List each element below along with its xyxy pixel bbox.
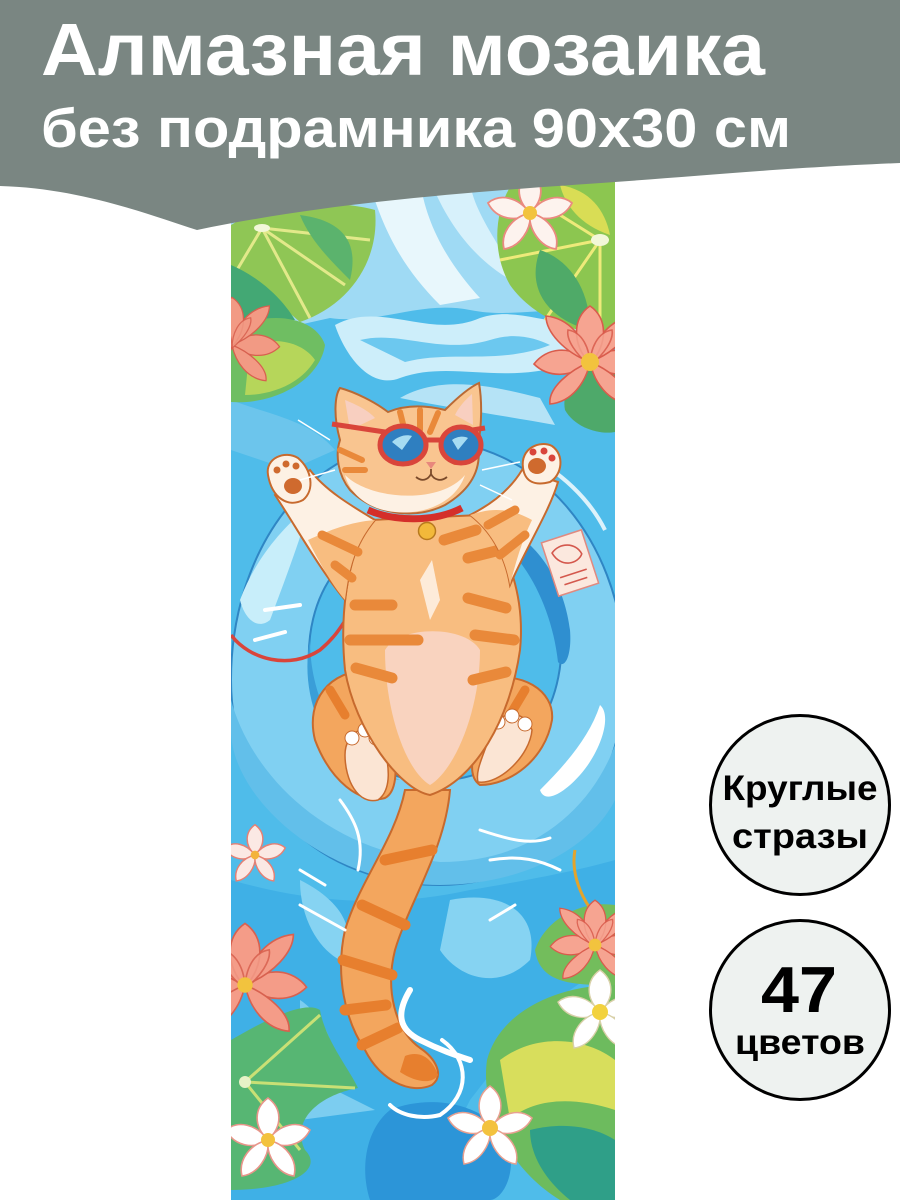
lotus: right lower (549, 900, 615, 980)
lily pad: top left (231, 204, 376, 330)
sunglasses (332, 424, 485, 464)
swim ring (231, 440, 625, 885)
flower: bottom white (448, 1086, 532, 1164)
cat collar and bell (368, 508, 462, 540)
header banner (0, 0, 900, 230)
badge: round rhinestones (710, 716, 890, 894)
cat head (298, 383, 520, 513)
badge: round rhinestones: стразы (732, 817, 868, 856)
badge: 47 colours: цветов (735, 1023, 865, 1062)
flower: lower left white (226, 1098, 310, 1176)
panel: painting of cat floating in pool (231, 182, 615, 1200)
cat right arm and paw (470, 444, 560, 585)
cat legs (313, 670, 552, 801)
lily pad: top right (497, 180, 615, 335)
cat left arm and paw (268, 455, 375, 600)
title: Алмазная мозаика (41, 8, 766, 91)
lotus: lower left (231, 922, 308, 1032)
badge: round rhinestones: Круглые (722, 769, 878, 808)
flower: left small (225, 825, 285, 881)
lily pad: right lower (486, 850, 615, 1200)
subtitle: без подрамника 90х30 см (41, 97, 791, 159)
cat body (343, 515, 521, 795)
water splashes (300, 800, 560, 1117)
flower: right white (557, 969, 615, 1049)
badge: 47 colours: 47 (761, 953, 837, 1026)
lily pad: left middle (231, 318, 325, 402)
stamp on ring (541, 530, 599, 596)
lily pad: right middle (564, 370, 615, 433)
lotus: right upper (533, 305, 615, 405)
lotus: left upper (231, 296, 280, 382)
lily pad: lower left (231, 1007, 358, 1190)
cat tail (341, 790, 450, 1088)
flower: top right white (486, 187, 573, 250)
badge: 47 colours (710, 920, 890, 1100)
water background (231, 175, 615, 1200)
